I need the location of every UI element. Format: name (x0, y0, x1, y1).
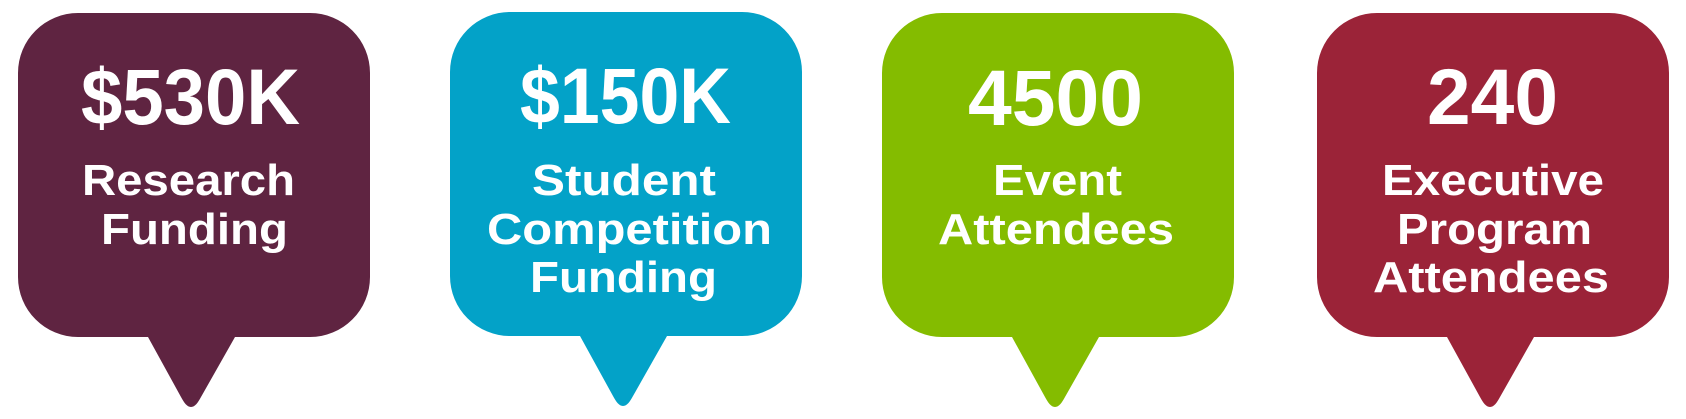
label: Executive Program Attendees: Program (1397, 205, 1592, 254)
speech bubble: crimson (1317, 13, 1669, 407)
label: Executive Program Attendees: Executive (1382, 156, 1604, 205)
speech bubble: blue (450, 12, 802, 406)
stat: $150K: $150K (520, 51, 731, 140)
panel: event attendees (882, 13, 1234, 407)
label: Student Competition Funding: Funding (530, 253, 717, 302)
label: Research Funding: Research (82, 156, 295, 205)
label: Event Attendees: Attendees (938, 205, 1174, 254)
stat: $530K: $530K (81, 52, 300, 141)
stat: 240: 240 (1427, 52, 1558, 141)
speech bubble: plum (18, 13, 370, 407)
label: Research Funding (82, 156, 295, 254)
label: Event Attendees: Event (993, 156, 1122, 205)
label: Student Competition Funding: Student (532, 156, 716, 205)
label: Student Competition Funding (487, 156, 772, 302)
label: Executive Program Attendees: Attendees (1373, 253, 1609, 302)
speech bubble: green (882, 13, 1234, 407)
label: Executive Program Attendees (1373, 156, 1609, 302)
stat: 4500: 4500 (968, 53, 1143, 142)
panel: student competition funding (450, 12, 802, 406)
label: Event Attendees (938, 156, 1174, 254)
panel: research funding (18, 13, 370, 407)
panel: executive program attendees (1317, 13, 1669, 407)
label: Student Competition Funding: Competition (487, 205, 772, 254)
label: Research Funding: Funding (101, 205, 288, 254)
